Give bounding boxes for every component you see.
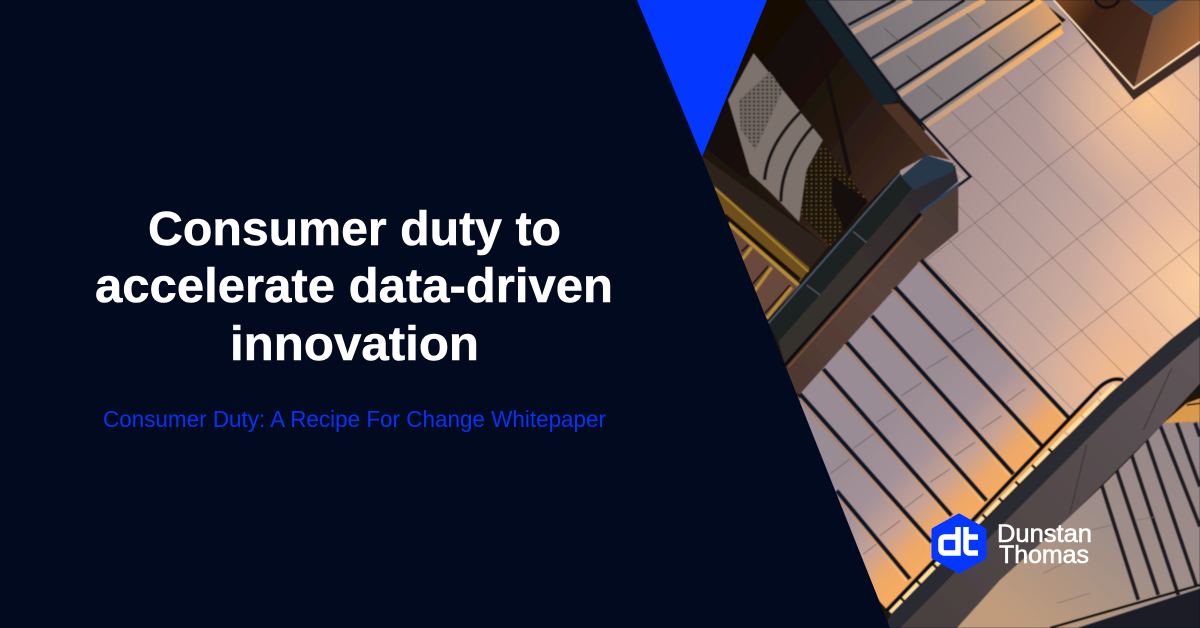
logo: Dunstan Thomas (934, 516, 1092, 571)
charcoal coping band (768, 173, 913, 342)
lower-left landing with gold rails (713, 185, 810, 323)
blue triangle accent (637, 0, 767, 157)
coping cap and pillar (901, 0, 1200, 190)
mid section: landing, coping band and lower wall (693, 150, 960, 395)
logo wordmark: Thomas (999, 541, 1089, 569)
balustrade panel (900, 337, 1200, 628)
tiled floor (900, 0, 1200, 450)
title (95, 203, 613, 371)
lower right: balustrade and marble wall (885, 317, 1200, 628)
marble wall with stripes (957, 398, 1200, 628)
black rail with orange line (785, 183, 960, 367)
interior wall and atrium (705, 0, 928, 247)
handrail and wedge (804, 0, 973, 188)
pillar with light strip (1054, 0, 1200, 100)
title: accelerate data-driven (95, 260, 613, 313)
upper stairs (826, 0, 1063, 129)
title: Consumer duty to (148, 203, 561, 256)
photo: overhead view of illuminated staircase (693, 0, 1200, 628)
charcoal handrail band with light strip (885, 317, 1200, 628)
logo wordmark: Dunstan (997, 520, 1092, 548)
brown band above the landing (702, 156, 828, 268)
title: innovation (230, 318, 479, 371)
reflective band under the coping (778, 165, 958, 365)
upper section: stairs, wall and atrium (705, 0, 1063, 247)
blue-grey coping cap (901, 155, 954, 190)
icon: blue hexagon with dt mark (934, 516, 984, 571)
lower stairs (797, 260, 1100, 609)
lower wall with stone reflection (786, 183, 958, 395)
logo wordmark (997, 520, 1092, 569)
subtitle: Consumer Duty: A Recipe For Change Whitepaper (103, 406, 606, 432)
